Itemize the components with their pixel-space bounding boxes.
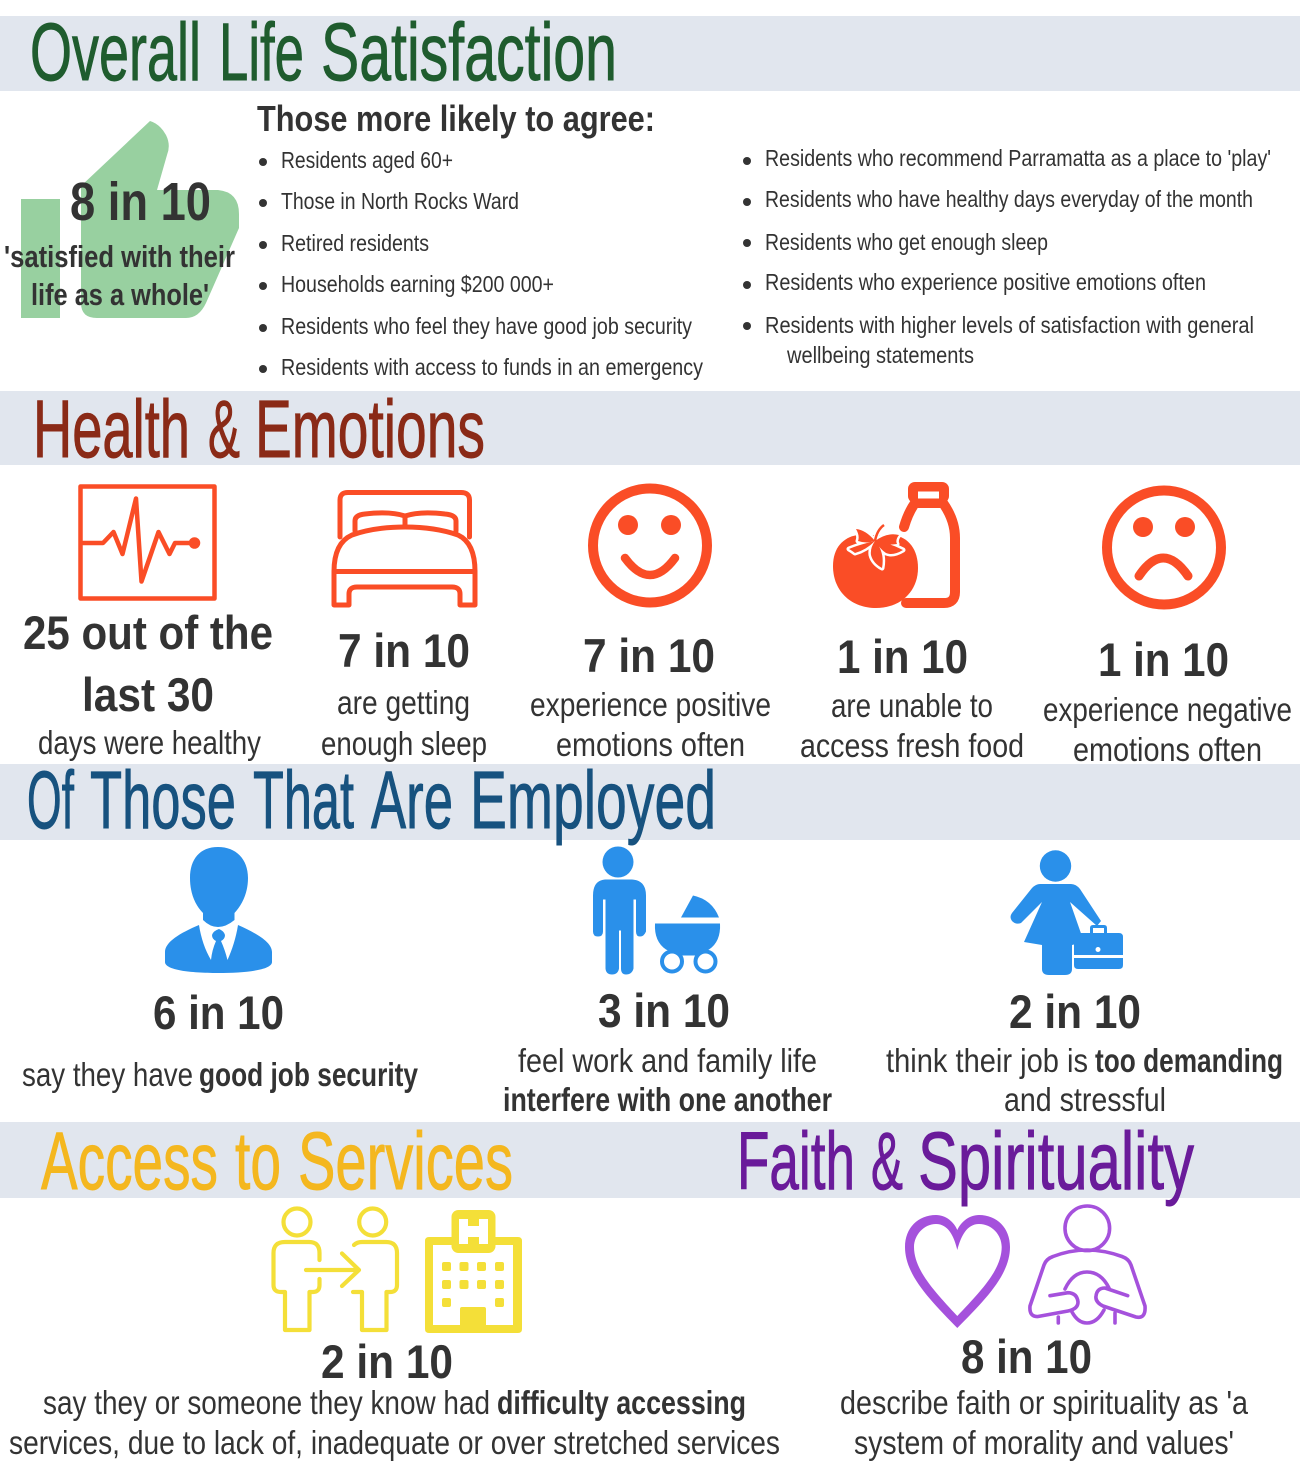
stat: 7 in 10 getting enough sleep: enough sleep <box>321 725 487 762</box>
heading: of those that are employed <box>27 755 716 846</box>
icon: businessman <box>165 847 272 973</box>
panel: access to services <box>9 1116 780 1461</box>
panel: faith and spirituality <box>737 1116 1249 1461</box>
stat: 2 in 10 difficulty accessing services: services, due to lack of, inadequate or over stretched services <box>9 1424 780 1461</box>
stat: 7 in 10 positive emotions: emotions often <box>556 726 745 763</box>
heading: faith and spirituality <box>737 1116 1194 1207</box>
heading: health and emotions: Emotions <box>255 384 485 475</box>
heading: faith and spirituality: & <box>871 1116 903 1207</box>
stat: 8 in 10 satisfied: 8 in 10 <box>70 172 211 232</box>
heading: access to services: Access <box>41 1116 218 1207</box>
icon: person cradling baby <box>1030 1206 1145 1323</box>
stat: 7 in 10 getting enough sleep: 7 in 10 <box>338 624 470 677</box>
heading: health and emotions <box>33 384 485 475</box>
list: wellbeing factors more likely to agree: Residents who experience positive emotions often <box>765 269 1206 295</box>
list: demographics more likely to agree: Residents aged 60+ <box>281 147 453 173</box>
list: wellbeing factors more likely to agree: Residents who get enough sleep <box>765 229 1048 255</box>
heading: overall life satisfaction: Overall <box>30 7 201 98</box>
stat: 25 out of the last 30 days <box>23 606 273 761</box>
stat: 8 in 10 satisfied <box>4 172 235 312</box>
stat: 6 in 10 good job security: 6 in 10 <box>153 986 284 1039</box>
stat: 8 in 10 faith as morality and values: system of morality and values' <box>854 1424 1234 1461</box>
list: demographics more likely to agree: Residents who feel they have good job security <box>281 313 692 339</box>
stat: 6 in 10 good job security: good job security <box>199 1056 419 1093</box>
stat: 2 in 10 job too demanding: 2 in 10 <box>1009 985 1141 1038</box>
stat: 25 out of the last 30 days: days were healthy <box>38 724 261 761</box>
icon: tomato and bottle <box>833 482 955 608</box>
heading: health and emotions: Health <box>33 384 190 475</box>
stat: 3 in 10 work and family interfere: 3 in 10 <box>598 984 730 1037</box>
stat: 3 in 10 work and family interfere: interfere with one another <box>503 1081 832 1118</box>
icon: hospital building <box>425 1210 522 1333</box>
stat: 1 in 10 unable to access fresh food: 1 in 10 <box>837 630 968 683</box>
heading: of those that are employed: Employed <box>470 755 716 846</box>
stat: 1 in 10 negative emotions: emotions often <box>1073 731 1262 768</box>
stat: 1 in 10 unable to access fresh food: are unable to <box>831 687 993 724</box>
stat: 7 in 10 getting enough sleep: are getting <box>337 684 470 721</box>
panel: health and emotions <box>23 384 1292 768</box>
stat: 2 in 10 difficulty accessing services <box>9 1335 780 1461</box>
heading: overall life satisfaction: Life <box>219 7 304 98</box>
icon: woman with briefcase <box>1010 850 1123 975</box>
stat: 8 in 10 faith as morality and values: 8 in 10 <box>961 1330 1092 1383</box>
stat: 7 in 10 positive emotions: 7 in 10 <box>583 629 715 682</box>
list: demographics more likely to agree: Retired residents <box>281 230 429 256</box>
stat: 1 in 10 unable to access fresh food <box>800 630 1024 764</box>
subheading: those more likely to agree: Those more likely to agree: <box>257 98 655 139</box>
icon: thumbs up <box>21 121 239 318</box>
panel: of those that are employed <box>22 755 1283 1118</box>
icon: smiling face <box>593 488 707 602</box>
stat: 8 in 10 satisfied: 'satisfied with their <box>4 239 235 274</box>
stat: 3 in 10 work and family interfere <box>503 984 832 1118</box>
stat: 2 in 10 job too demanding: think their job is <box>886 1042 1088 1079</box>
heading: access to services: to <box>235 1116 281 1207</box>
stat: 2 in 10 difficulty accessing services: say they or someone they know had <box>43 1384 490 1421</box>
heading: faith and spirituality: Spirituality <box>918 1116 1194 1207</box>
stat: 6 in 10 good job security: say they have <box>22 1056 193 1093</box>
heading: of those that are employed: Those <box>90 755 236 846</box>
icon: parent with pram <box>593 846 720 974</box>
heading: access to services <box>41 1116 513 1207</box>
stat: 8 in 10 faith as morality and values: describe faith or spirituality as 'a <box>840 1384 1249 1421</box>
icon: sad face <box>1107 490 1221 604</box>
heading: overall life satisfaction <box>30 7 617 98</box>
stat: 25 out of the last 30 days: last 30 <box>82 668 214 721</box>
list: demographics more likely to agree: Residents with access to funds in an emergency <box>281 354 703 380</box>
heading: of those that are employed: That <box>253 755 354 846</box>
stat: 1 in 10 negative emotions: 1 in 10 <box>1098 633 1229 686</box>
stat: 7 in 10 getting enough sleep <box>321 624 487 762</box>
stat: 7 in 10 positive emotions <box>530 629 771 763</box>
heading: health and emotions: & <box>208 384 240 475</box>
icon: heart rate monitor <box>80 486 214 598</box>
heading: of those that are employed: Are <box>371 755 453 846</box>
panel: overall life satisfaction <box>4 7 1271 380</box>
stat: 8 in 10 faith as morality and values <box>840 1330 1249 1461</box>
heading: overall life satisfaction: Satisfaction <box>321 7 617 98</box>
icon: bed <box>334 492 475 605</box>
icon: heart <box>905 1215 1010 1328</box>
list: wellbeing factors more likely to agree: wellbeing statements <box>786 342 974 368</box>
list: demographics more likely to agree: Households earning $200 000+ <box>281 271 554 297</box>
heading: access to services: Services <box>298 1116 513 1207</box>
stat: 1 in 10 unable to access fresh food: access fresh food <box>800 727 1024 764</box>
stat: 8 in 10 satisfied: life as a whole' <box>31 277 209 312</box>
heading: faith and spirituality: Faith <box>737 1116 855 1207</box>
stat: 2 in 10 difficulty accessing services: difficulty accessing <box>497 1384 746 1421</box>
list: demographics more likely to agree: Those in North Rocks Ward <box>281 188 519 214</box>
heading: of those that are employed: Of <box>27 755 74 846</box>
stat: 6 in 10 good job security <box>22 986 419 1093</box>
icon: people referral arrow <box>274 1208 397 1330</box>
list: wellbeing factors more likely to agree <box>743 145 1271 368</box>
list: demographics more likely to agree <box>259 147 703 380</box>
stat: 1 in 10 negative emotions <box>1043 633 1292 768</box>
stat: 7 in 10 positive emotions: experience positive <box>530 686 771 723</box>
stat: 2 in 10 job too demanding <box>886 985 1283 1118</box>
stat: 2 in 10 job too demanding: and stressful <box>1004 1081 1166 1118</box>
stat: 3 in 10 work and family interfere: feel work and family life <box>518 1042 817 1079</box>
stat: 2 in 10 difficulty accessing services: 2 in 10 <box>321 1335 453 1388</box>
stat: 25 out of the last 30 days: 25 out of the <box>23 606 273 659</box>
